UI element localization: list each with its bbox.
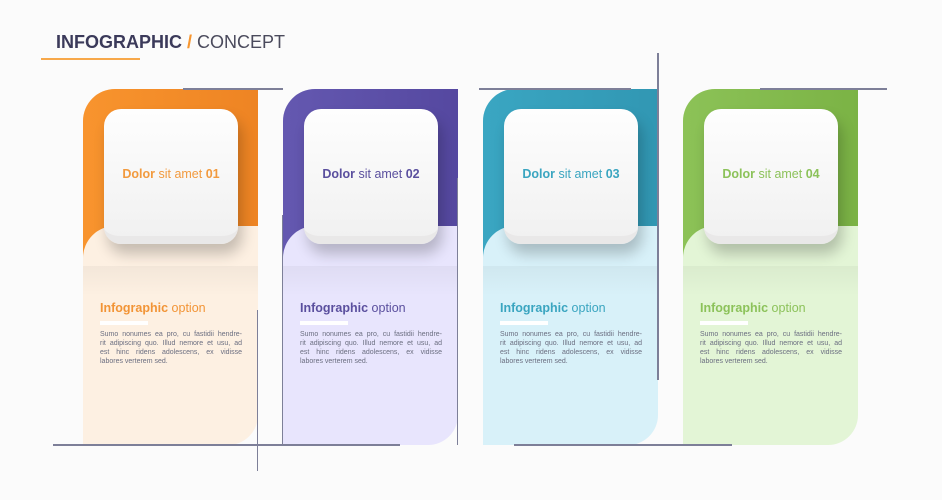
- card 3 text: [500, 330, 642, 365]
- card 4 text: [700, 330, 842, 365]
- card 3 text: est hinc ridens adolescens, ex vidisse: [500, 349, 642, 356]
- card 1 text: Sumo nonumes ea pro, cu fastidii hendre-: [100, 331, 242, 338]
- card 1: [83, 89, 258, 444]
- card 1 box: [104, 109, 238, 244]
- card 1 heading: Infographic option: [100, 301, 206, 315]
- card 3 text: Sumo nonumes ea pro, cu fastidii hendre-: [500, 331, 642, 338]
- card 4 text: Sumo nonumes ea pro, cu fastidii hendre-: [700, 331, 842, 338]
- card 2 box: [304, 109, 438, 244]
- card 2 text: labores verterem sed.: [300, 358, 368, 365]
- title: INFOGRAPHIC / CONCEPT: [56, 32, 285, 52]
- card 3: [483, 89, 658, 445]
- card 4 text: rit adipiscing quo. Illud nemore et usu, ad: [700, 340, 842, 347]
- card 3 heading: Infographic option: [500, 301, 606, 315]
- card 4 box: [704, 109, 838, 244]
- card 2 text: Sumo nonumes ea pro, cu fastidii hendre-: [300, 331, 442, 338]
- card 3 text: labores verterem sed.: [500, 358, 568, 365]
- card 4: [683, 89, 858, 445]
- card 3 box: Dolor sit amet 03: [522, 167, 620, 181]
- card 4 text: est hinc ridens adolescens, ex vidisse: [700, 349, 842, 356]
- card 1 text: est hinc ridens adolescens, ex vidisse: [100, 349, 242, 356]
- card 1 text: [100, 330, 242, 365]
- card 2 box: Dolor sit amet 02: [322, 167, 420, 181]
- card 3 box: [504, 109, 638, 244]
- card 2 text: rit adipiscing quo. Illud nemore et usu, ad: [300, 340, 442, 347]
- title underline: [41, 58, 140, 60]
- card 3 text: rit adipiscing quo. Illud nemore et usu, ad: [500, 340, 642, 347]
- card 1 text: labores verterem sed.: [100, 358, 168, 365]
- card 4 heading: Infographic option: [700, 301, 806, 315]
- card 4 box: Dolor sit amet 04: [722, 167, 820, 181]
- card 2: [283, 89, 458, 445]
- card 4 text: labores verterem sed.: [700, 358, 768, 365]
- card 2 text: [300, 330, 442, 365]
- card 1 box: Dolor sit amet 01: [122, 167, 220, 181]
- card 1 text: rit adipiscing quo. Illud nemore et usu, ad: [100, 340, 242, 347]
- card 2 heading: Infographic option: [300, 301, 406, 315]
- card 2 text: est hinc ridens adolescens, ex vidisse: [300, 349, 442, 356]
